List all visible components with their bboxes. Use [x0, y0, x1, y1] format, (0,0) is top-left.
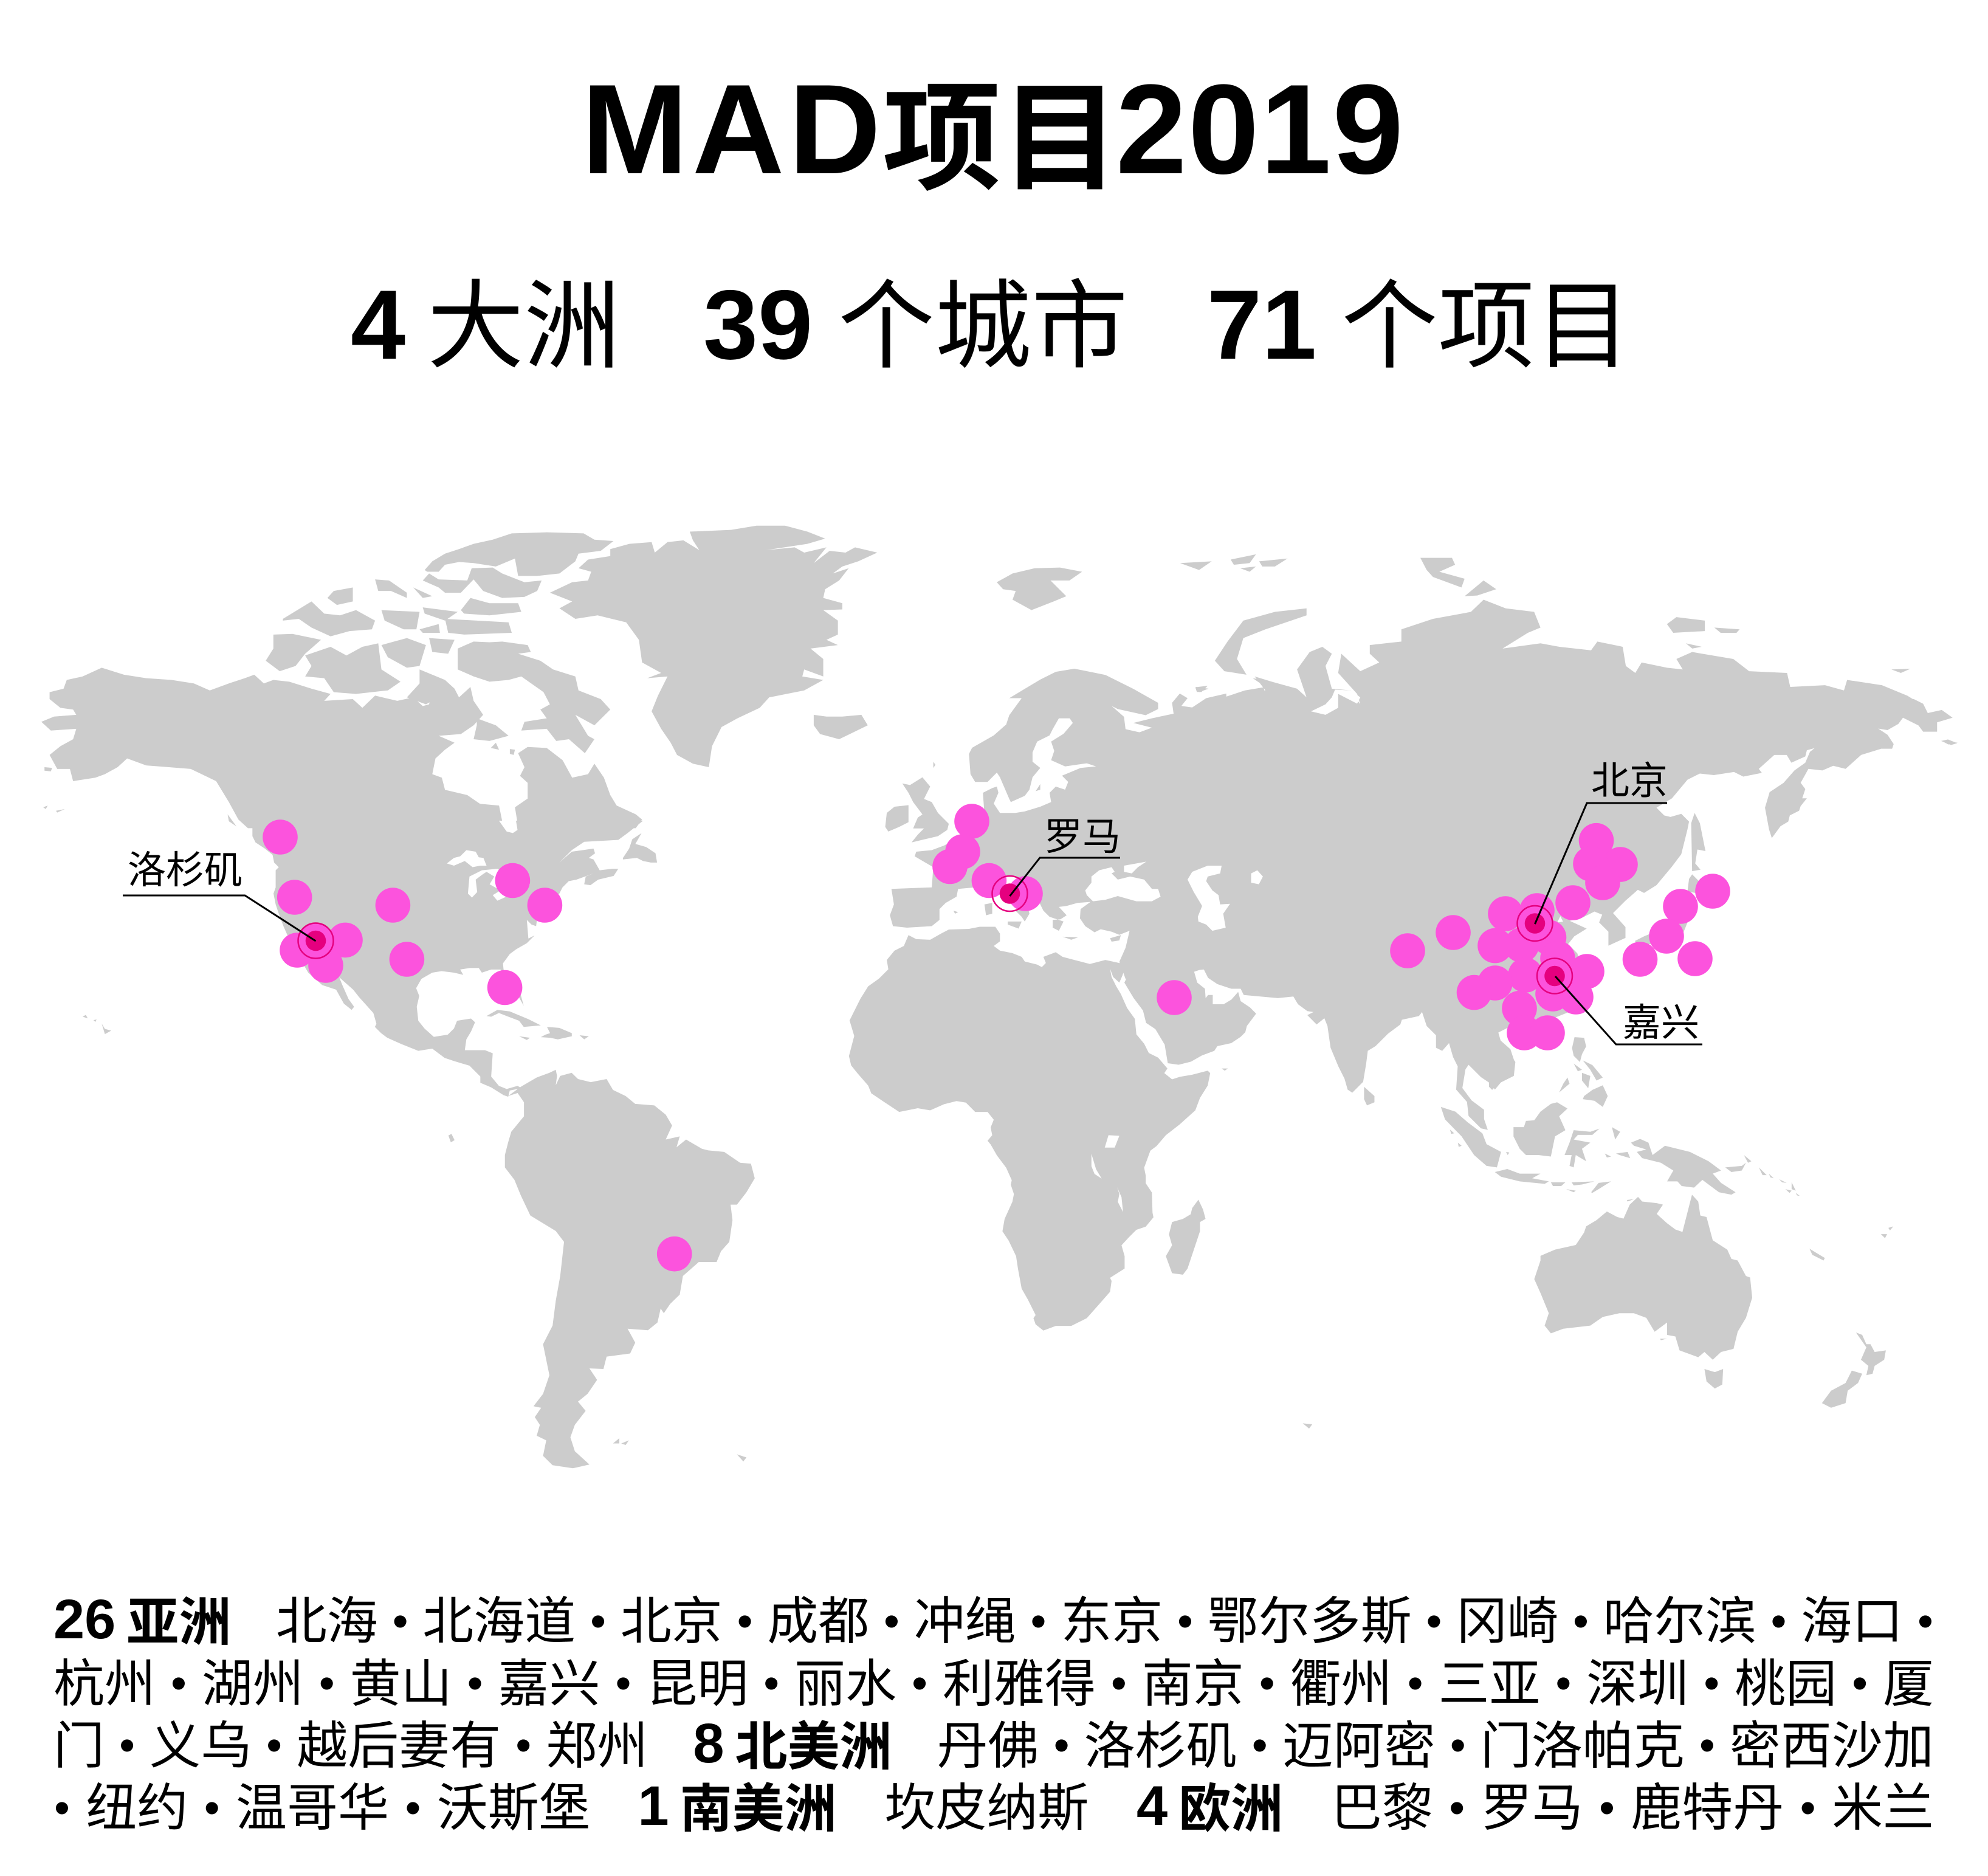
list line 3: 郑州	[546, 1705, 648, 1779]
list line 3	[53, 1703, 1934, 1780]
list line 1: •	[590, 1595, 606, 1646]
callout: 嘉兴	[1537, 958, 1702, 1047]
list line 1: •	[884, 1595, 899, 1646]
list line 1: 鄂尔多斯	[1208, 1581, 1412, 1654]
list line 1: •	[1426, 1595, 1442, 1646]
list line 2	[53, 1643, 1934, 1717]
title: 项目	[882, 43, 1120, 215]
list line 2: 衢州	[1290, 1643, 1392, 1717]
subtitle statistics: 4	[351, 270, 405, 380]
list line 4: •	[1599, 1782, 1615, 1832]
list line 2: 杭州	[53, 1643, 156, 1717]
list line 3: 门	[53, 1705, 105, 1779]
land: europe and west asia	[886, 669, 1325, 979]
land: south america	[505, 1070, 1312, 1468]
list line 4	[54, 1766, 1934, 1842]
list line 3: 密西沙加	[1730, 1705, 1934, 1779]
land: east asia and russian far east	[1489, 699, 1957, 1090]
land: southeast asia, oceania and australia	[1364, 1037, 1893, 1408]
list line 2: 桃园	[1735, 1643, 1837, 1717]
list line 3: •	[515, 1720, 531, 1770]
highlight ring background: rome	[992, 876, 1027, 911]
list line 2: •	[1704, 1658, 1719, 1708]
list line 1: •	[1573, 1595, 1589, 1646]
list line 4: •	[1449, 1782, 1465, 1832]
list line 2: 厦	[1883, 1643, 1934, 1717]
list line 3: •	[1450, 1720, 1466, 1770]
list line 3: •	[119, 1720, 135, 1770]
callout: 北京: 北京	[1591, 750, 1668, 805]
list line 1: •	[1770, 1595, 1786, 1646]
list line 2: •	[1408, 1658, 1423, 1708]
list line 4: •	[405, 1782, 421, 1832]
list line 3: 义乌	[150, 1705, 252, 1779]
list line 3: 迈阿密	[1282, 1705, 1436, 1779]
list line 1: 海口	[1801, 1581, 1903, 1654]
list line 1: 成都	[767, 1581, 869, 1654]
list line 1: 北海	[276, 1581, 378, 1654]
list line 3: •	[1054, 1720, 1070, 1770]
land: south asia and arabia	[1124, 790, 1527, 1130]
list line 2: 南京	[1142, 1643, 1244, 1717]
callout: 北京	[1517, 750, 1668, 941]
list line 2: •	[912, 1658, 927, 1708]
list line 4: 温哥华	[236, 1767, 389, 1841]
list line 1: 东京	[1061, 1581, 1163, 1654]
list line 4: •	[1800, 1782, 1816, 1832]
list line 3: 门洛帕克	[1481, 1705, 1685, 1779]
list line 4: 米兰	[1832, 1767, 1934, 1841]
list line 2: •	[171, 1658, 187, 1708]
list line 2: •	[763, 1658, 779, 1708]
list line 1: •	[1177, 1595, 1193, 1646]
list line 1: 冈崎	[1456, 1581, 1558, 1654]
list line 1: •	[393, 1595, 408, 1646]
list line 4: 4欧洲	[1137, 1766, 1283, 1842]
list line 1: 26亚洲	[53, 1579, 231, 1655]
list line 2: •	[319, 1658, 335, 1708]
list line 4: 坎皮纳斯	[884, 1767, 1089, 1841]
list line 3: •	[266, 1720, 282, 1770]
list line 2: 湖州	[202, 1643, 304, 1717]
land: africa	[849, 926, 1228, 1331]
list line 2: •	[615, 1658, 631, 1708]
list line 3: •	[1252, 1720, 1268, 1770]
list line 2: 利雅得	[943, 1643, 1096, 1717]
list line 1: 北海道	[422, 1581, 576, 1654]
callout: 罗马: 罗马	[1044, 806, 1121, 861]
list line 4: 1南美洲	[638, 1766, 837, 1842]
subtitle statistics: 大洲	[427, 248, 621, 388]
list line 2: 深圳	[1586, 1643, 1688, 1717]
list line 2: •	[467, 1658, 483, 1708]
land: northern russia and arctic islands	[997, 554, 1958, 830]
list line 1: •	[1917, 1595, 1933, 1646]
list line 1: 冲绳	[914, 1581, 1016, 1654]
land: greenland and canadian arctic	[43, 526, 877, 1034]
title	[582, 43, 1405, 215]
list line 4: 纽约	[86, 1767, 188, 1841]
list line 2: 黄山	[350, 1643, 452, 1717]
list line 2: •	[1259, 1658, 1275, 1708]
list line 1: •	[1031, 1595, 1046, 1646]
list line 3: 越后妻有	[297, 1705, 501, 1779]
list line 1: 北京	[621, 1581, 723, 1654]
list line 4: 罗马	[1481, 1767, 1583, 1841]
list line 4: 巴黎	[1331, 1767, 1433, 1841]
inland water: black sea, caspian and aral	[1085, 861, 1263, 931]
list line 3: 洛杉矶	[1084, 1705, 1237, 1779]
subtitle statistics: 39	[703, 270, 813, 380]
list line 2: 三亚	[1438, 1643, 1540, 1717]
list line 2: 昆明	[646, 1643, 748, 1717]
list line 3: •	[1699, 1720, 1715, 1770]
list line 4: •	[204, 1782, 220, 1832]
list line 1	[53, 1579, 1933, 1655]
project location dots	[263, 804, 1730, 1272]
land: lower north and central america	[250, 821, 657, 1142]
list line 1: •	[737, 1595, 752, 1646]
subtitle statistics: 71	[1207, 270, 1316, 380]
list line 1: 哈尔滨	[1603, 1581, 1756, 1654]
inland water: ob gulf and baffin lake	[525, 690, 1360, 715]
subtitle statistics: 个城市	[838, 248, 1128, 388]
inland water: african lakes	[1092, 1135, 1123, 1212]
callout: 洛杉矶: 洛杉矶	[128, 840, 242, 895]
callout: 嘉兴: 嘉兴	[1623, 992, 1699, 1047]
list line 3: 8北美洲	[693, 1703, 892, 1780]
list line 2: 嘉兴	[498, 1643, 600, 1717]
list line 4: •	[54, 1782, 70, 1832]
list line 2: •	[1555, 1658, 1571, 1708]
subtitle statistics	[351, 248, 1631, 388]
callout: 罗马	[992, 806, 1121, 911]
list line 4: 沃斯堡	[437, 1767, 590, 1841]
list line 4: 鹿特丹	[1631, 1767, 1784, 1841]
land: upper north america	[41, 667, 642, 828]
list line 3: 丹佛	[937, 1705, 1039, 1779]
list line 2: •	[1852, 1658, 1868, 1708]
title: MAD	[582, 58, 885, 201]
list line 2: •	[1111, 1658, 1127, 1708]
subtitle statistics: 个项目	[1341, 248, 1631, 388]
inland water: north american lakes and hudson	[447, 821, 530, 901]
list line 2: 丽水	[794, 1643, 896, 1717]
title: 2019	[1116, 58, 1405, 201]
callout: 洛杉矶	[123, 840, 333, 958]
